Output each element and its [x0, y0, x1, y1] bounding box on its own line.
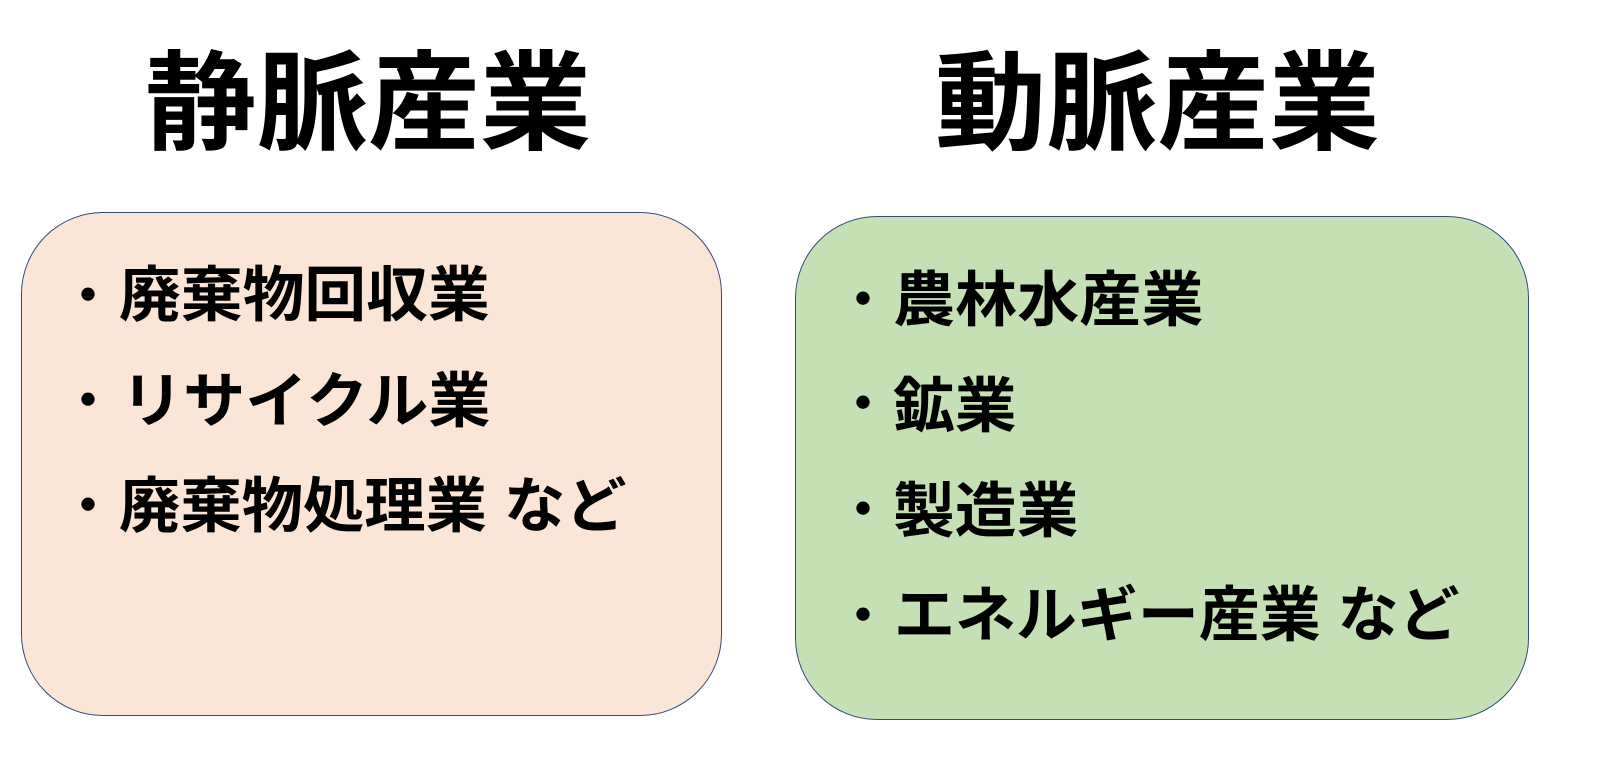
list item: 農林水産業: 農林水産業 [893, 266, 1204, 334]
panel: 動脈産業 list [795, 216, 1529, 720]
list item: 鉱業: ・ [837, 376, 889, 434]
list item: 製造業: ・ [837, 482, 889, 540]
list item: エネルギー産業 など: ・ [837, 588, 889, 646]
list item: リサイクル業: ・ [62, 372, 114, 430]
list item: 製造業: 製造業 [893, 478, 1078, 544]
list item: 鉱業: 鉱業 [893, 373, 1017, 440]
list item: 廃棄物回収業: ・ [62, 268, 114, 326]
heading: 動脈産業: 動脈産業 [935, 42, 1380, 164]
list item: リサイクル業: リサイクル業 [121, 368, 490, 434]
list item: 鉱業 [837, 373, 1017, 440]
list item: エネルギー産業 など: エネルギー産業 など [894, 582, 1460, 648]
list item: 農林水産業: ・ [837, 272, 889, 330]
heading: 静脈産業: 静脈産業 [144, 42, 591, 164]
list item: 廃棄物回収業: 廃棄物回収業 [119, 262, 490, 329]
list item: 廃棄物処理業 など: 廃棄物処理業 など [119, 473, 627, 540]
panel: 静脈産業 list [20, 212, 722, 716]
list item: 廃棄物処理業 など: ・ [62, 478, 114, 536]
